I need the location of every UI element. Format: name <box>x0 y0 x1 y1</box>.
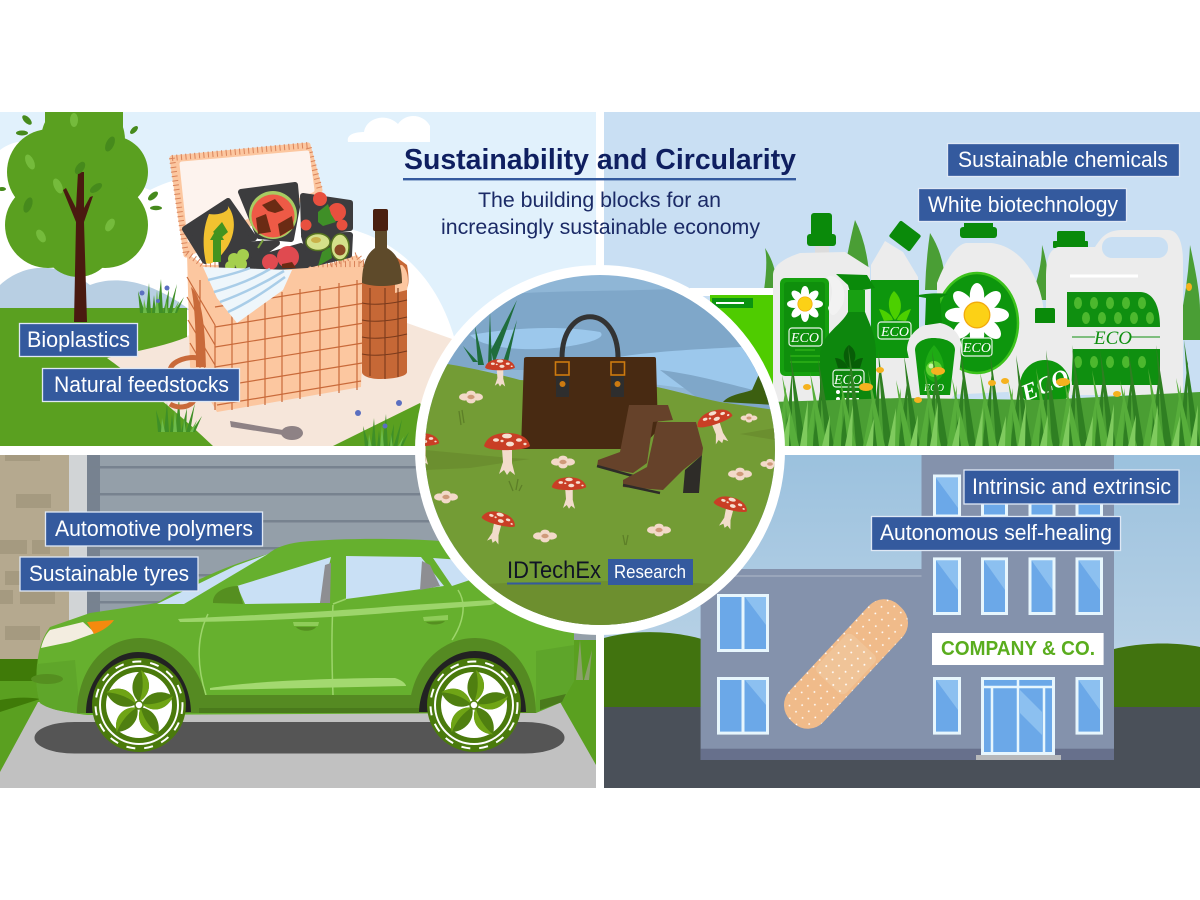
yellow flowers <box>803 283 1192 403</box>
food trays with recycling symbols <box>185 185 350 271</box>
flowers <box>434 391 780 542</box>
back grass <box>764 220 1200 340</box>
meadow ground <box>425 361 775 625</box>
label: Sustainable chemicals: Sustainable chemicals <box>958 147 1168 172</box>
handbag <box>521 317 658 449</box>
grass tufts with cornflowers <box>138 279 409 448</box>
green car <box>31 539 574 752</box>
green ground <box>0 308 213 446</box>
IDTechEx logo <box>507 557 693 585</box>
center circle: leather goods on meadow <box>405 265 785 635</box>
road <box>604 707 1200 788</box>
spray bottle <box>820 274 876 400</box>
picnic blanket <box>108 323 452 446</box>
subtitle <box>441 189 760 239</box>
title: Sustainability and Circularity <box>404 144 796 176</box>
bottle with tilted cap: ECO <box>880 325 909 340</box>
large jug with daisy: ECO <box>962 341 991 356</box>
label: Intrinsic and extrinsic: Intrinsic and extrinsic <box>972 474 1171 499</box>
company sign <box>932 633 1104 665</box>
basket lid <box>172 145 320 255</box>
small round bottle <box>1008 308 1073 400</box>
label: Natural feedstocks: Natural feedstocks <box>54 372 229 397</box>
label: Autonomous self-healing: Autonomous self-healing <box>880 520 1112 545</box>
bandage icon <box>784 599 908 729</box>
white background hills <box>0 142 454 339</box>
reeds <box>463 300 517 365</box>
striped towel <box>203 267 292 323</box>
windows <box>718 476 1102 733</box>
big bottle with daisy label <box>773 213 870 402</box>
subtitle: increasingly sustainable economy <box>441 216 760 239</box>
label: White biotechnology: White biotechnology <box>928 192 1118 217</box>
large jug with daisy <box>936 223 1047 395</box>
divider gaps <box>596 112 604 788</box>
label: Sustainable tyres: Sustainable tyres <box>29 561 189 586</box>
bottle with tilted cap <box>871 220 921 400</box>
cloud <box>348 116 430 142</box>
large canister <box>1046 230 1183 395</box>
grass and driveway <box>0 640 596 788</box>
IDTechEx logo: IDTechEx <box>507 557 601 584</box>
wine bottle in holder <box>362 209 408 379</box>
building <box>701 455 1114 760</box>
cleaning packet <box>690 288 773 384</box>
tree <box>0 98 162 322</box>
label: Bioplastics <box>20 324 138 356</box>
boots <box>597 405 703 493</box>
panel: self-healing building scene <box>604 455 1200 788</box>
hills <box>604 632 1200 707</box>
subtitle: The building blocks for an <box>478 189 721 212</box>
pump bottle <box>907 293 962 399</box>
mushrooms <box>405 359 749 547</box>
panel: automotive green car scene <box>0 455 596 788</box>
blue hills <box>0 268 190 310</box>
label: Automotive polymers <box>46 512 262 546</box>
label: Bioplastics: Bioplastics <box>27 327 130 352</box>
spoon <box>230 421 303 440</box>
small round bottle: ECO <box>1017 365 1073 408</box>
big bottle with daisy label: ECO <box>790 331 819 346</box>
brick wall and garage door <box>0 455 596 665</box>
entrance doors <box>976 677 1061 760</box>
pump bottle: ECO <box>923 383 944 394</box>
spray bottle: ECO <box>833 373 862 388</box>
large canister: ECO <box>1093 328 1132 349</box>
panel: bioplastics picnic scene <box>0 98 596 448</box>
panel: sustainable chemicals eco bottles scene <box>604 112 1200 446</box>
front grass <box>762 340 1200 446</box>
grass sprigs <box>459 410 628 545</box>
label: Automotive polymers: Automotive polymers <box>55 516 253 541</box>
company sign: COMPANY & CO. <box>941 638 1095 660</box>
basket body <box>170 253 365 412</box>
label: Sustainable tyres <box>20 557 198 591</box>
IDTechEx logo: Research <box>614 562 686 582</box>
bush <box>723 372 775 405</box>
